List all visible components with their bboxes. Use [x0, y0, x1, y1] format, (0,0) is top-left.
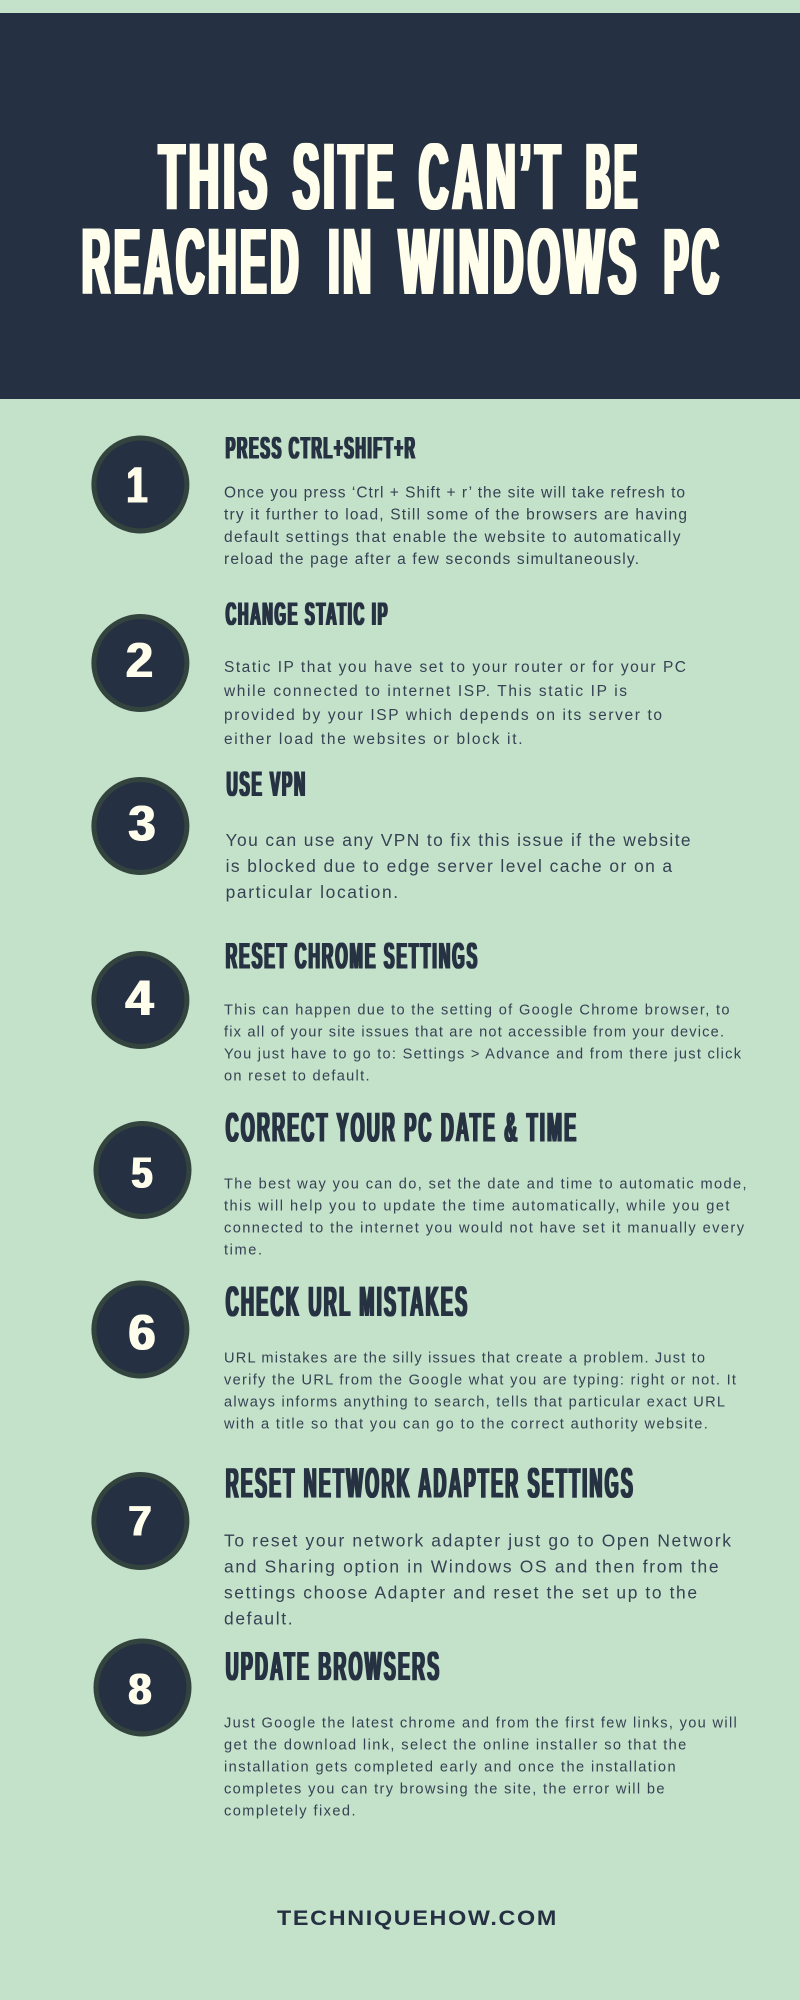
step 8 panel: UPDATE BROWSERS [226, 1643, 441, 1689]
title: CAN’T [419, 124, 564, 230]
title: REACHED [82, 209, 302, 315]
number badge 3 [94, 780, 187, 872]
body text 3: particular location. [226, 882, 398, 902]
body text 6: always informs anything to search, tells that particular exact URL [224, 1394, 725, 1410]
body text 1: reload the page after a few seconds simultaneously. [224, 551, 639, 568]
body text 6: verify the URL from the Google what you are typing: right or not. It [224, 1372, 736, 1388]
body text 8: Just Google the latest chrome and from the first few links, you will [224, 1715, 737, 1731]
body text 7 [224, 1531, 731, 1629]
number badge 8: 8 [128, 1665, 152, 1714]
body text 8: installation gets completed early and once the installation [224, 1759, 676, 1775]
title [82, 124, 722, 315]
body text 6: URL mistakes are the silly issues that create a problem. Just to [224, 1350, 705, 1366]
body text 6: with a title so that you can go to the correct authority website. [223, 1416, 708, 1432]
body text 3: You can use any VPN to fix this issue if the website [226, 830, 691, 850]
number badge 6: 6 [128, 1304, 156, 1360]
number badge 6 [94, 1283, 187, 1376]
body text 8 [224, 1715, 737, 1819]
body text 4: This can happen due to the setting of Google Chrome browser, to [224, 1002, 730, 1018]
body text 1: default settings that enable the website to automatically [224, 529, 681, 546]
number badge 2: 2 [126, 634, 153, 688]
body text 1: try it further to load, Still some of the browsers are having [224, 506, 687, 523]
footer website name: TECHNIQUEHOW.COM [277, 1907, 558, 1930]
body text 7: To reset your network adapter just go to Open Network [224, 1531, 731, 1551]
step 6 panel: CHECK URL MISTAKES [226, 1278, 470, 1326]
title: SITE [293, 124, 398, 230]
step 3 panel: USE VPN [227, 765, 307, 804]
body text 3: is blocked due to edge server level cache or on a [226, 856, 672, 876]
step 1 panel: PRESS CTRL+SHIFT+R [226, 429, 417, 465]
body text 1 [224, 484, 687, 568]
body text 5: this will help you to update the time automatically, while you get [224, 1198, 729, 1214]
body text 7: and Sharing option in Windows OS and then from the [224, 1557, 718, 1577]
body text 2: while connected to internet ISP. This static IP is [223, 683, 627, 700]
body text 5: time. [224, 1242, 262, 1258]
body text 5: connected to the internet you would not have set it manually every [224, 1220, 745, 1236]
step 2 panel: CHANGE STATIC IP [226, 596, 389, 632]
body text 5 [224, 1176, 746, 1258]
number badge 2 [94, 616, 187, 710]
step 7 panel [94, 1459, 731, 1629]
body text 4: on reset to default. [224, 1068, 370, 1084]
number badge 3: 3 [128, 796, 156, 852]
step 8 panel [96, 1641, 737, 1819]
body text 2 [223, 659, 686, 748]
body text 4: You just have to go to: Settings > Advance and from there just click [224, 1046, 742, 1062]
body text 8: completes you can try browsing the site, the error will be [224, 1781, 664, 1797]
body text 7: settings choose Adapter and reset the set up to the [224, 1583, 697, 1603]
number badge 7 [94, 1474, 187, 1568]
body text 2: provided by your ISP which depends on its server to [224, 707, 662, 724]
number badge 1: 1 [126, 456, 148, 514]
title: BE [586, 124, 640, 230]
body text 2: either load the websites or block it. [224, 731, 522, 748]
body text 4 [224, 1002, 742, 1084]
title: IN [328, 209, 375, 315]
body text 6 [223, 1350, 736, 1432]
step 5 panel [96, 1103, 746, 1258]
header banner [0, 13, 800, 399]
body text 5: The best way you can do, set the date and time to automatic mode, [224, 1176, 746, 1192]
title: THIS [159, 124, 272, 230]
body text 8: get the download link, select the online installer so that the [224, 1737, 686, 1753]
step 6 panel [94, 1278, 736, 1432]
body text 4: fix all of your site issues that are not accessible from your device. [224, 1024, 724, 1040]
step 4 panel [94, 934, 742, 1084]
body text 2: Static IP that you have set to your router or for your PC [224, 659, 686, 676]
body text 1: Once you press ‘Ctrl + Shift + r’ the site will take refresh to [224, 484, 685, 501]
body text 7: default. [224, 1609, 293, 1629]
number badge 4: 4 [126, 970, 154, 1026]
number badge 5: 5 [132, 1148, 152, 1197]
body text 8: completely fixed. [224, 1803, 356, 1819]
step 3 panel [94, 765, 691, 902]
number badge 4 [94, 954, 187, 1046]
number badge 5 [96, 1124, 189, 1216]
step 1 panel [94, 429, 687, 568]
body text 3 [226, 830, 691, 902]
step 2 panel [94, 596, 686, 748]
number badge 1 [94, 438, 187, 531]
number badge 8 [96, 1641, 189, 1734]
number badge 7: 7 [128, 1498, 152, 1546]
